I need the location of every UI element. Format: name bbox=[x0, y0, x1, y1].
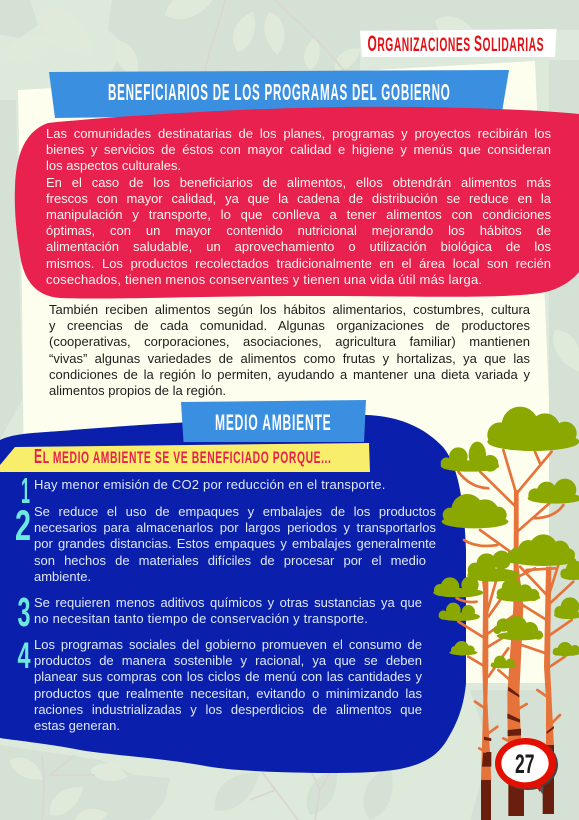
number 4: 4 bbox=[18, 635, 31, 676]
red panel text: frescos con mayor calidad, ya que la cadena de distribución se reduce en la bbox=[46, 191, 551, 206]
item 3 text: no necesitan tanto tiempo de conservación y transporte. bbox=[34, 611, 368, 626]
page number badge: 27 bbox=[515, 749, 534, 779]
item 2 text: por grandes distancias. Estos empaques y embalajes generalmente bbox=[34, 536, 436, 551]
item 4 text bbox=[34, 637, 422, 733]
number 1: 1 bbox=[21, 470, 30, 511]
paragraph on cream paper: y creencias de cada comunidad. Algunas organizaciones de productores bbox=[49, 318, 530, 333]
red panel text: cosechados, tienen menos conservantes y tienen una vida útil más larga. bbox=[46, 272, 482, 287]
red panel text: mismos. Los productos recolectados tradicionalmente en el área local son recién bbox=[46, 256, 551, 271]
paragraph on cream paper: condiciones de la región lo permiten, ayudando a mantener una dieta variada y bbox=[49, 367, 530, 382]
item 2 text bbox=[34, 504, 436, 584]
branches bbox=[457, 450, 573, 752]
red panel text: óptimas, con un mayor contenido nutricional mejorando los hábitos de bbox=[46, 223, 551, 238]
item 4 text: planear sus compras con los ciclos de menú con las cantidades y bbox=[34, 669, 422, 684]
yellow subheading banner: EL MEDIO AMBIENTE SE VE BENEFICIADO PORQUE... bbox=[34, 446, 332, 468]
number 2: 2 bbox=[15, 502, 31, 550]
trunks bbox=[481, 490, 554, 820]
red panel text: los aspectos culturales. bbox=[46, 158, 181, 173]
item 4 text: Los programas sociales del gobierno promueven el consumo de bbox=[34, 637, 422, 652]
item 2 text: ambiente. bbox=[34, 569, 91, 584]
item 4 text: estas generan. bbox=[34, 718, 120, 733]
paragraph on cream paper: “vivas” algunas variedades de alimentos como frutas y hortalizas, ya que las bbox=[49, 351, 530, 366]
item 4 text: productos de manera sostenible y racional, ya que se deben bbox=[34, 653, 422, 668]
item 1 text: Hay menor emisión de CO2 por reducción en el transporte. bbox=[34, 477, 386, 492]
item 4 text: productos que realmente necesitan, evitando o minimizando las bbox=[34, 686, 422, 701]
red panel text bbox=[46, 126, 551, 287]
red panel text: alimentación saludable, un aprovechamiento o utilización biológica de los bbox=[46, 239, 551, 254]
paragraph on cream paper: También reciben alimentos según los hábitos alimentarios, costumbres, cultura bbox=[49, 302, 530, 317]
paragraph on cream paper: alimentos propios de la región. bbox=[49, 383, 226, 398]
item 2 text: son hechos de materiales difíciles de procesar por el medio bbox=[34, 553, 426, 568]
item 2 text: Se reduce el uso de empaques y embalajes de los productos bbox=[34, 504, 436, 519]
item 2 text: necesarios para almacenarlos por largos periodos y transportarlos bbox=[34, 520, 436, 535]
red panel text: bienes y servicios de éstos con mayor calidad e higiene y menús que consideran bbox=[46, 142, 551, 157]
heading banner: medio ambiente: MEDIO AMBIENTE bbox=[215, 410, 332, 435]
item 3 text: Se requieren menos aditivos químicos y otras sustancias ya que bbox=[34, 595, 422, 610]
item 4 text: raciones industrializadas y los desperdicios de alimentos que bbox=[34, 702, 422, 717]
paragraph on cream paper bbox=[49, 302, 530, 398]
red panel text: Las comunidades destinatarias de los planes, programas y proyectos recibirán los bbox=[46, 126, 551, 141]
canopies bbox=[433, 407, 579, 668]
red panel text: En el caso de los beneficiarios de alimentos, ellos obtendrán alimentos más bbox=[46, 175, 551, 190]
number 3: 3 bbox=[18, 589, 30, 635]
paragraph on cream paper: (cooperativas, corporaciones, asociaciones, agricultura familiar) mantienen bbox=[49, 334, 530, 349]
background stems bbox=[42, 0, 345, 820]
cream paper bbox=[18, 61, 549, 683]
red panel text: manipulación y transporte, lo que conlleva a tener alimentos con condiciones bbox=[46, 207, 551, 222]
item 3 text bbox=[34, 595, 422, 626]
